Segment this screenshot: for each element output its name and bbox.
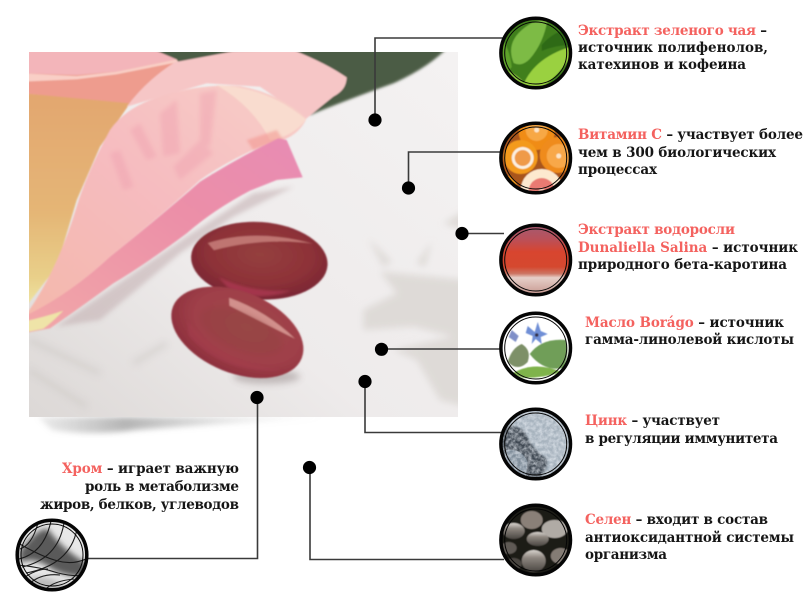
text: green tea extract: источник полифенолов, bbox=[578, 40, 768, 56]
capsule top bbox=[188, 217, 330, 304]
text: zinc bbox=[585, 413, 778, 447]
text: selenium: антиоксидантной системы bbox=[585, 530, 794, 546]
icon: borage plant bbox=[500, 312, 572, 384]
text: selenium: Селен – входит в состав bbox=[585, 512, 768, 528]
text: green tea extract: катехинов и кофеина bbox=[578, 57, 746, 73]
text: green tea extract bbox=[578, 23, 768, 73]
photo: rose petal and capsules bbox=[23, 47, 467, 417]
connector: zinc bbox=[358, 375, 504, 432]
text: chromium: роль в метаболизме bbox=[85, 479, 239, 495]
text: vitamin C: чем в 300 биологических bbox=[578, 145, 777, 161]
capsule bottom bbox=[170, 286, 305, 380]
connector: borago bbox=[375, 343, 504, 356]
connector: chromium bbox=[85, 391, 264, 558]
text: vitamin C: процессах bbox=[578, 162, 658, 178]
icon: chromium net bbox=[16, 519, 88, 591]
text: borago oil bbox=[585, 315, 794, 348]
text: zinc: в регуляции иммунитета bbox=[585, 431, 778, 447]
icon: citrus slices bbox=[499, 122, 572, 194]
text: Dunaliella Salina extract: природного бета-каротина bbox=[578, 257, 787, 273]
text: borago oil: Масло Borágo – источник bbox=[585, 315, 784, 331]
text: selenium: организма bbox=[585, 547, 667, 563]
photo drop shadow bbox=[38, 417, 330, 433]
icon: zinc mineral bbox=[500, 408, 572, 480]
petal veins bbox=[110, 90, 217, 190]
capsule shadow bbox=[233, 369, 300, 384]
orange interior bbox=[23, 93, 130, 310]
text: Dunaliella Salina extract bbox=[578, 222, 798, 273]
text: vitamin C: Витамин С – участвует более bbox=[578, 127, 803, 143]
text: zinc: Цинк – участвует bbox=[585, 413, 720, 429]
petal pink rim bbox=[23, 138, 303, 333]
connector: green tea bbox=[368, 38, 504, 127]
icon: green tea leaves bbox=[500, 17, 572, 89]
text: borago oil: гамма-линолевой кислоты bbox=[585, 332, 794, 348]
text: vitamin C bbox=[578, 127, 803, 178]
text: chromium bbox=[40, 461, 239, 513]
table streaks bbox=[35, 342, 164, 372]
icon: red algae bbox=[500, 224, 572, 296]
connector: dunaliella bbox=[455, 227, 504, 240]
petal shadow on table bbox=[57, 187, 293, 327]
text: Dunaliella Salina extract: Dunaliella Salina – источник bbox=[578, 240, 798, 256]
flower shadow pattern on table bbox=[363, 210, 467, 407]
text: green tea extract: Экстракт зеленого чая – bbox=[578, 23, 767, 39]
connector: vitamin C bbox=[402, 152, 504, 195]
text: selenium bbox=[585, 512, 794, 563]
text: chromium: Хром – играет важную bbox=[62, 461, 239, 477]
background leaf bbox=[147, 47, 448, 115]
text: Dunaliella Salina extract: Экстракт водоросли bbox=[578, 222, 735, 238]
top pink band bbox=[29, 62, 174, 104]
main petal bbox=[23, 86, 307, 318]
icon: selenium pellets bbox=[500, 504, 572, 576]
back petal bbox=[127, 50, 347, 118]
connector: selenium bbox=[303, 461, 504, 560]
text: chromium: жиров, белков, углеводов bbox=[40, 497, 239, 513]
